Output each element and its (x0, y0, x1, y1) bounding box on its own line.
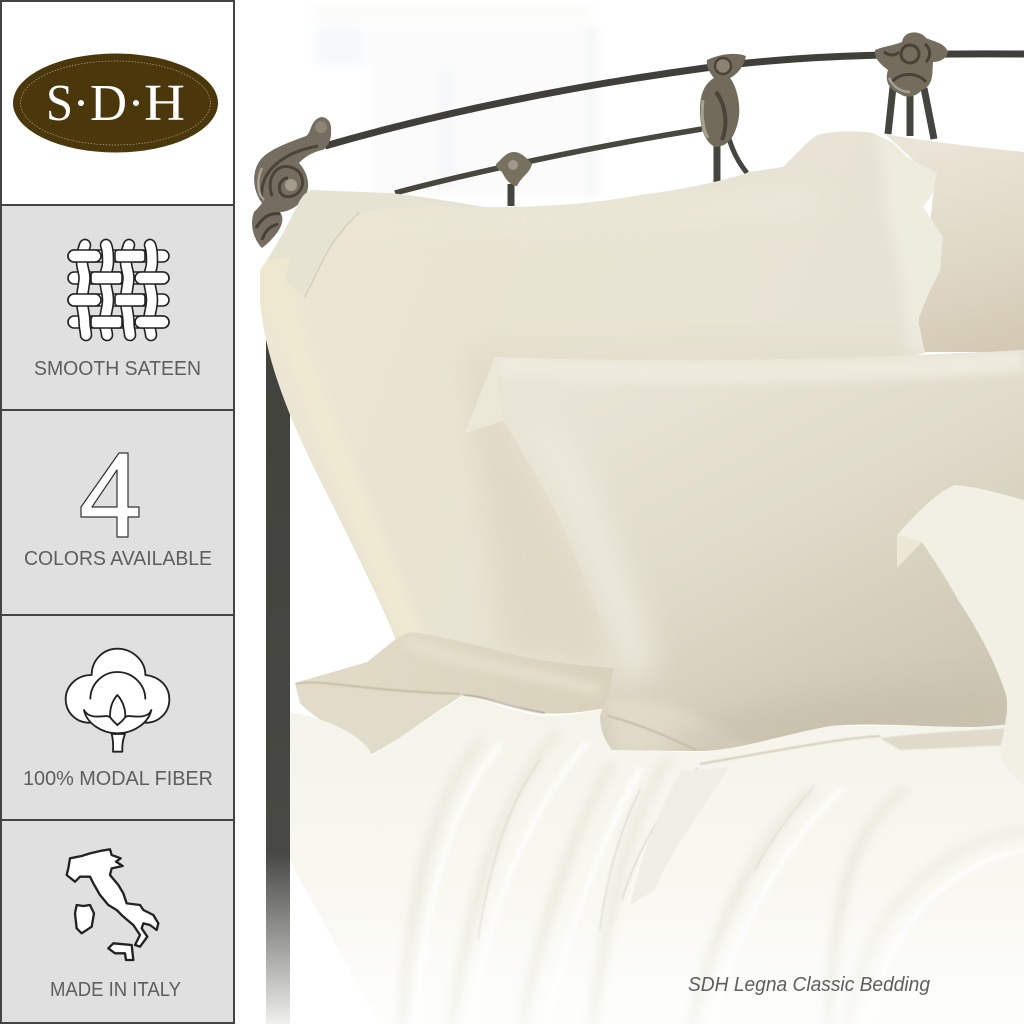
icon: cotton boll (66, 649, 169, 752)
label: smooth sateen: SMOOTH SATEEN (34, 358, 201, 380)
warm left edge (258, 265, 425, 650)
blanket texture stripe (630, 768, 728, 905)
pillow flap corner (267, 190, 483, 297)
panel: smooth sateen (1, 205, 234, 410)
panel: logo (1, 1, 234, 205)
window haze (312, 8, 596, 196)
icon: SDH oval logo: S (46, 75, 73, 132)
rear right pillow (885, 134, 1024, 352)
front pillow (465, 348, 1024, 760)
label: made in italy: MADE IN ITALY (50, 979, 181, 1001)
lower pillow flap (295, 632, 614, 755)
icon: SDH oval logo: D (90, 75, 127, 132)
label: modal fiber: 100% MODAL FIBER (23, 768, 213, 790)
bed post (266, 340, 290, 1024)
pillows behind (258, 130, 1024, 755)
panel: colors available (1, 410, 234, 615)
bright right seam (880, 139, 943, 350)
mid ornament (700, 54, 746, 147)
sheets and blanket (290, 696, 1024, 1024)
spindles (511, 87, 934, 206)
top arched rail (325, 54, 1024, 146)
photo background (235, 0, 1024, 1024)
icon: numeral 4 (81, 453, 139, 537)
panel: made in italy (1, 820, 234, 1023)
top rosette ornament (875, 32, 948, 97)
icon: SDH oval logo: H (144, 75, 185, 132)
icon: weave (68, 245, 169, 335)
label: colors available: COLORS AVAILABLE (24, 548, 212, 570)
lower arched rail (395, 129, 702, 193)
icon: map of Italy (67, 849, 158, 960)
soft fade at base of photo (290, 900, 1024, 1024)
beige band at blanket edge (880, 728, 1012, 750)
caption: SDH Legna Classic Bedding (688, 974, 930, 996)
fold shading (402, 735, 1024, 1024)
bed frame (252, 32, 1024, 1024)
panel: modal fiber (1, 615, 234, 820)
back left pillow (260, 131, 943, 700)
right foreground pillow (897, 485, 1024, 785)
scroll ornament (252, 117, 331, 248)
small knot ornament (496, 152, 532, 186)
icon: SDH oval logo (13, 54, 218, 152)
sidebar (1, 1, 234, 1023)
soft shadow under front pillow (478, 367, 604, 662)
